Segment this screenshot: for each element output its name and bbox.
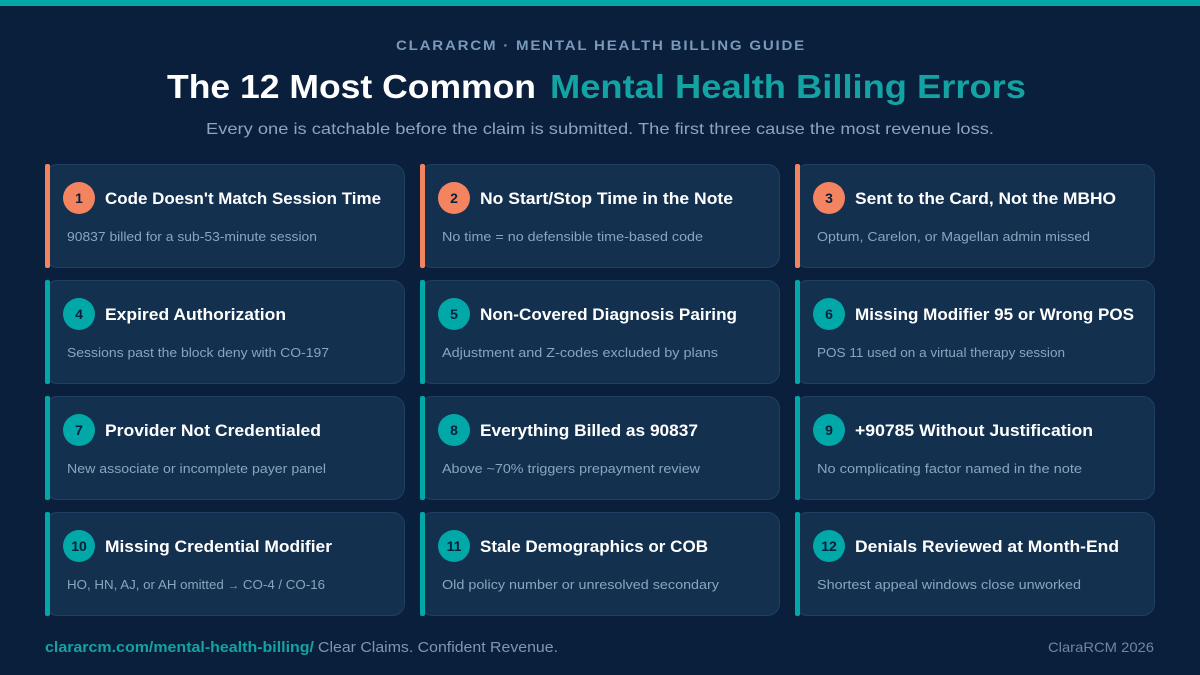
title: Mental Health Billing Errors	[550, 68, 1026, 105]
card 10 heading: Missing Credential Modifier	[105, 538, 333, 556]
card 8 text: Above ~70% triggers prepayment review	[442, 461, 701, 476]
card 6 heading: Missing Modifier 95 or Wrong POS	[855, 306, 1134, 324]
card 2 text: No time = no defensible time-based code	[442, 229, 703, 244]
badge 12: 12	[821, 538, 837, 554]
card 11 text: Old policy number or unresolved secondary	[442, 577, 720, 592]
card 10	[45, 512, 404, 616]
card 3	[795, 164, 1154, 268]
card 7 text: New associate or incomplete payer panel	[67, 461, 326, 476]
badge 9: 9	[825, 422, 833, 438]
card 1	[45, 164, 404, 268]
badge 9	[813, 414, 845, 446]
title: The 12 Most Common	[167, 68, 536, 105]
card 9 text: No complicating factor named in the note	[817, 461, 1082, 476]
badge 5: 5	[450, 306, 458, 322]
card 12 text: Shortest appeal windows close unworked	[817, 577, 1081, 592]
badge 7: 7	[75, 422, 83, 438]
badge 5	[438, 298, 470, 330]
badge 1: 1	[75, 190, 83, 206]
card 3 text: Optum, Carelon, or Magellan admin missed	[817, 229, 1090, 244]
card 4	[45, 280, 404, 384]
top accent bar	[0, 0, 1200, 6]
card 1 heading: Code Doesn't Match Session Time	[105, 190, 381, 208]
subtitle: Every one is catchable before the claim is submitted. The first three cause the most revenue loss.	[206, 121, 994, 138]
card 11	[420, 512, 780, 616]
card 4 heading: Expired Authorization	[105, 306, 286, 324]
card 4 text: Sessions past the block deny with CO-197	[67, 345, 329, 360]
badge 6	[813, 298, 845, 330]
card 9 heading: +90785 Without Justification	[855, 422, 1093, 440]
badge 10: 10	[71, 538, 87, 554]
badge 3	[813, 182, 845, 214]
card 11 heading: Stale Demographics or COB	[480, 538, 708, 556]
card 5	[420, 280, 780, 384]
card 2	[420, 164, 780, 268]
card 12	[795, 512, 1154, 616]
badge 6: 6	[825, 306, 833, 322]
card 5 text: Adjustment and Z-codes excluded by plans	[442, 345, 719, 360]
card 6 text: POS 11 used on a virtual therapy session	[817, 345, 1065, 360]
card 9	[795, 396, 1154, 500]
card 1 text: 90837 billed for a sub-53-minute session	[67, 229, 317, 244]
badge 1	[63, 182, 95, 214]
badge 4	[63, 298, 95, 330]
card 12 heading: Denials Reviewed at Month-End	[855, 538, 1119, 556]
card 10 text: HO, HN, AJ, or AH omitted → CO-4 / CO-16	[67, 577, 325, 592]
card 5 heading: Non-Covered Diagnosis Pairing	[480, 306, 737, 324]
title	[167, 68, 1026, 105]
badge 7	[63, 414, 95, 446]
badge 4: 4	[75, 306, 83, 322]
footer year: ClaraRCM 2026	[1048, 639, 1154, 655]
footer link and tagline: clararcm.com/mental-health-billing/	[45, 640, 314, 656]
badge 11: 11	[447, 538, 462, 554]
badge 2: 2	[450, 190, 458, 206]
card 8 heading: Everything Billed as 90837	[480, 422, 698, 440]
card 7 heading: Provider Not Credentialed	[105, 422, 321, 440]
card 3 heading: Sent to the Card, Not the MBHO	[855, 190, 1116, 208]
footer link and tagline: Clear Claims. Confident Revenue.	[318, 640, 558, 656]
card 8	[420, 396, 780, 500]
card 7	[45, 396, 404, 500]
badge 2	[438, 182, 470, 214]
badge 8	[438, 414, 470, 446]
eyebrow: CLARARCM · MENTAL HEALTH BILLING GUIDE	[396, 38, 806, 53]
footer link and tagline	[45, 640, 558, 656]
card 2 heading: No Start/Stop Time in the Note	[480, 190, 733, 208]
badge 12	[813, 530, 845, 562]
badge 8: 8	[450, 422, 458, 438]
badge 10	[63, 530, 95, 562]
card 6	[795, 280, 1154, 384]
badge 3: 3	[825, 190, 833, 206]
badge 11	[438, 530, 470, 562]
